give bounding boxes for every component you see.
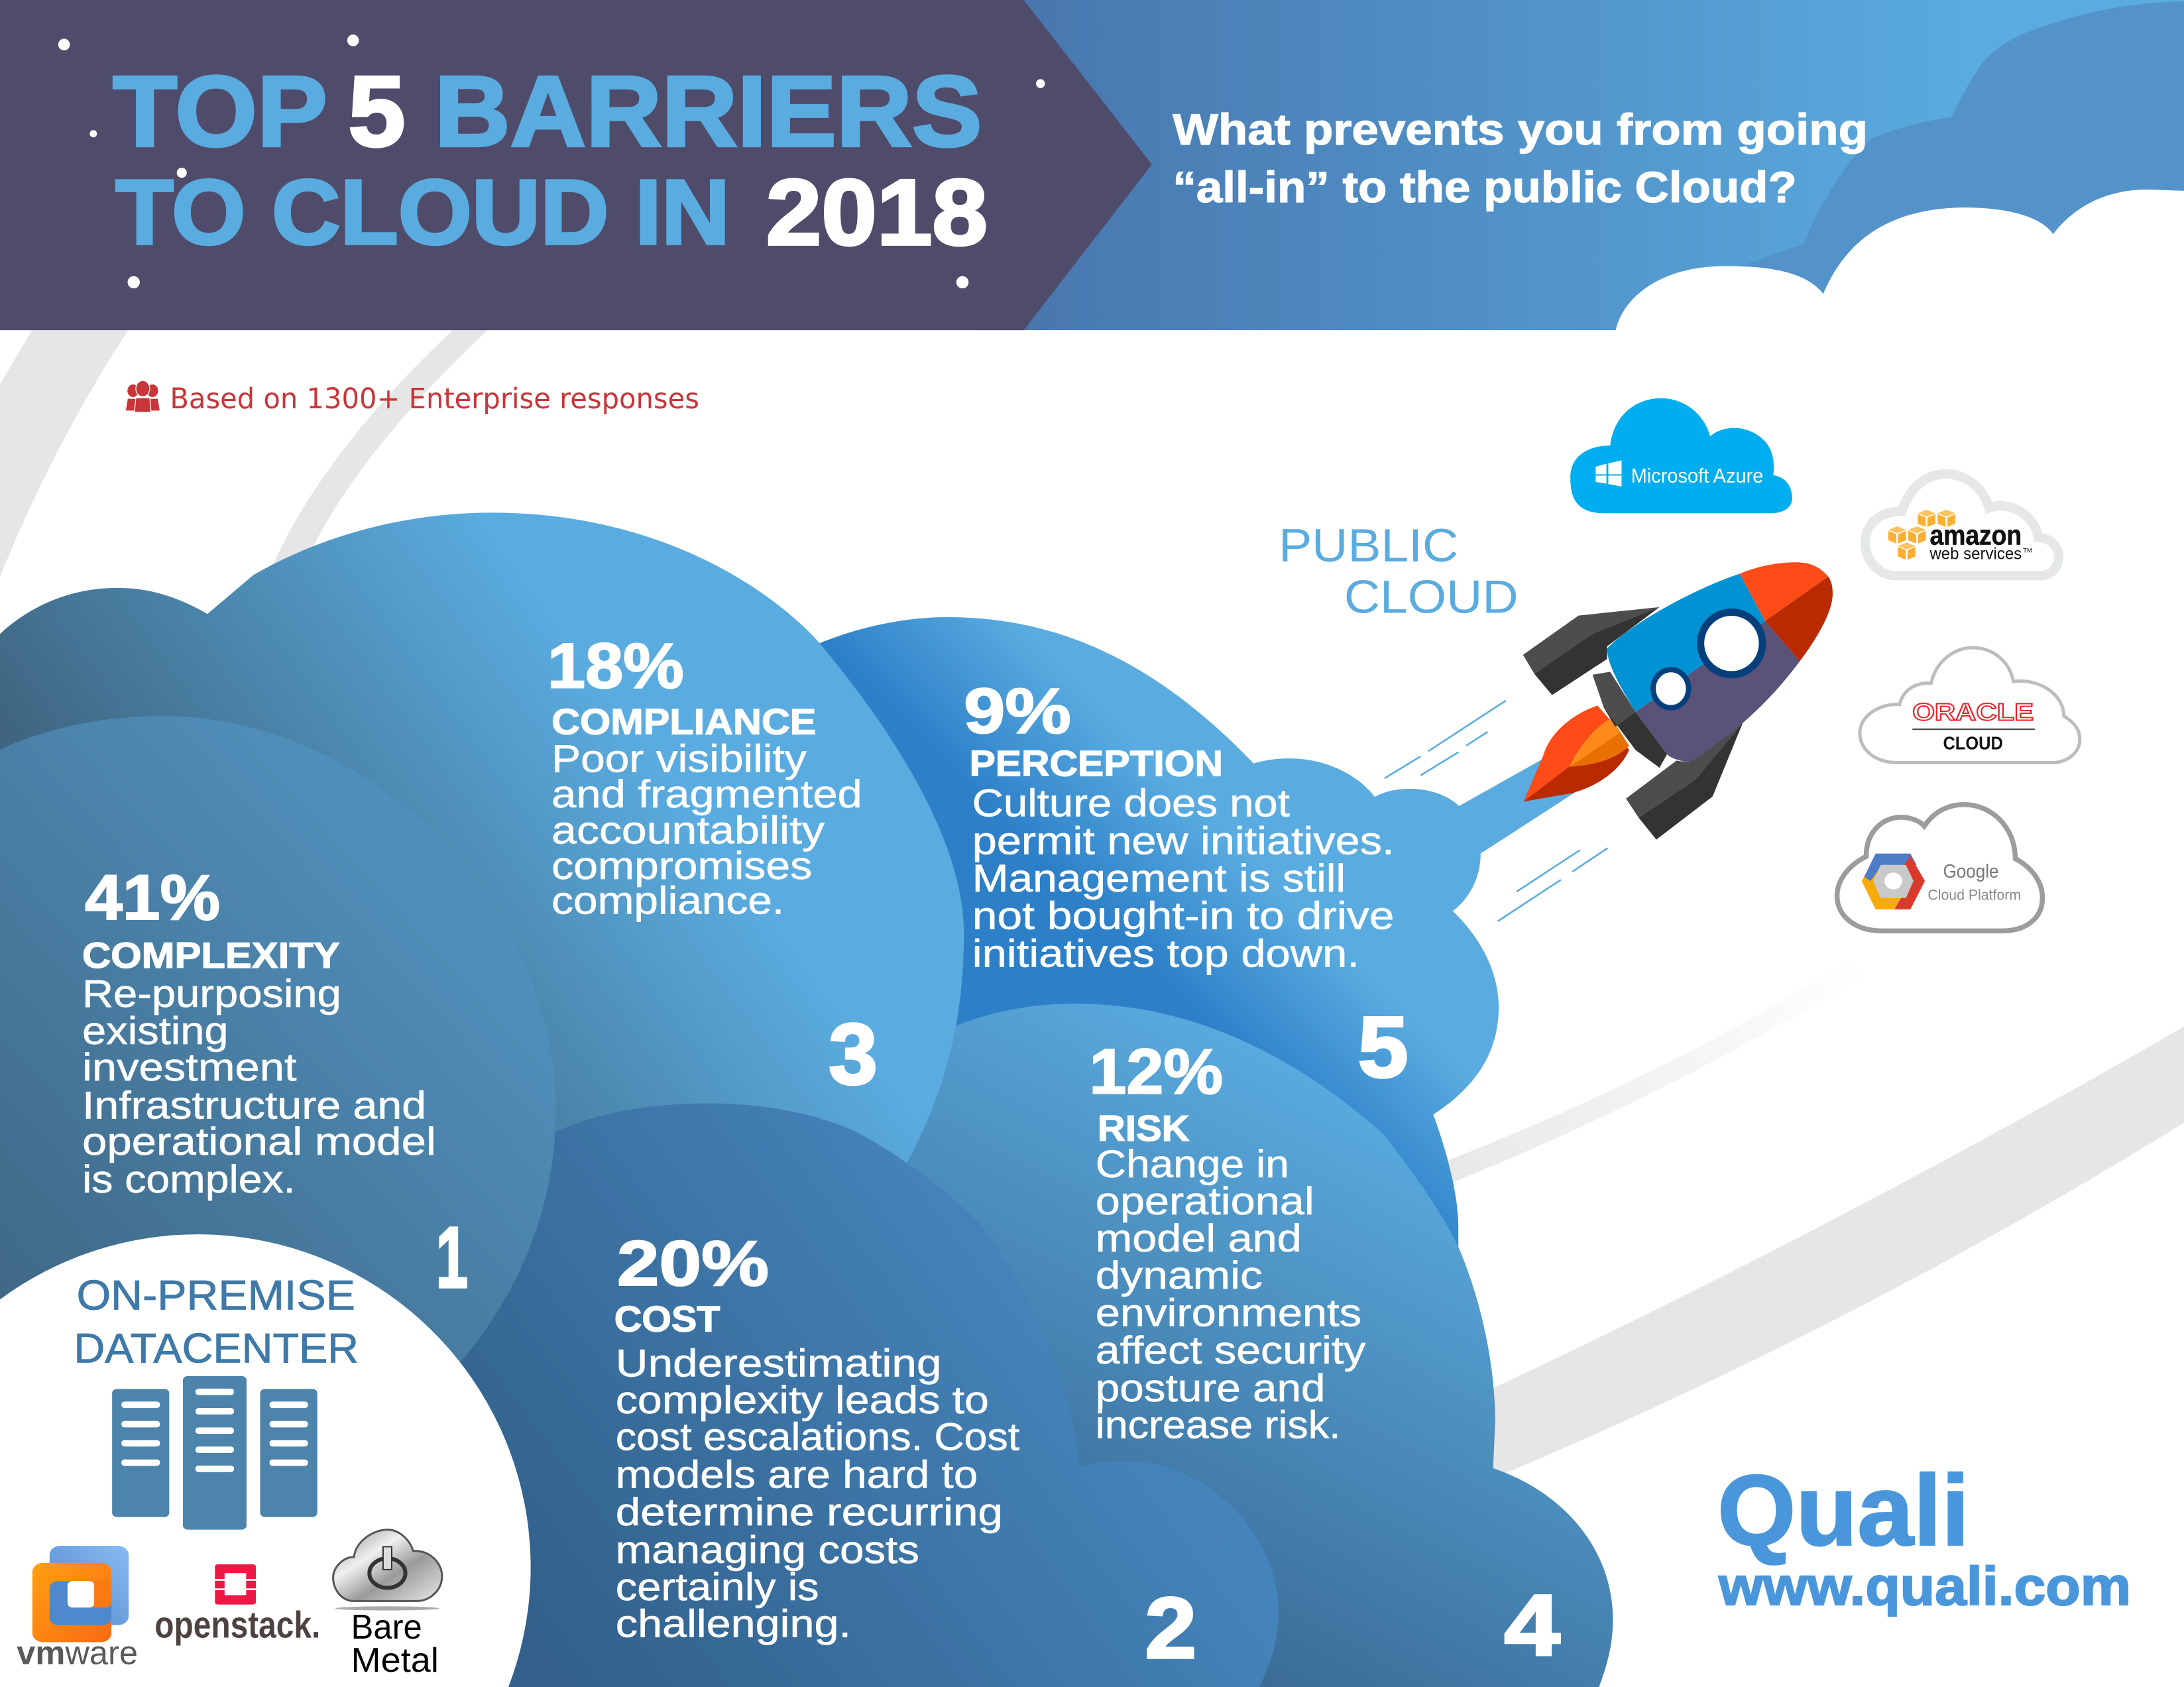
grey background swooshes (0, 330, 2184, 1519)
panel: complexity 41%: investment (82, 1046, 297, 1089)
public cloud heading: CLOUD (1344, 571, 1519, 623)
panel: risk 12%: RISK (1098, 1108, 1190, 1149)
panel: risk 12%: operational (1096, 1180, 1314, 1223)
title text: 5 (348, 56, 406, 168)
quali logo and url: www.quali.com (1718, 1556, 2131, 1617)
panel: complexity 41%: is complex. (82, 1158, 295, 1201)
cloud 4 risk (836, 1004, 1613, 1687)
panel: risk 12%: model and (1096, 1217, 1302, 1260)
logo: oracle cloud: ORACLE (1912, 699, 2034, 726)
logo: microsoft azure cloud: Microsoft Azure (1631, 465, 1763, 487)
subtitle question (1173, 105, 1868, 212)
portholes (1653, 612, 1762, 708)
quali logo and url: Quali (1717, 1455, 1969, 1567)
panel: risk 12%: increase risk. (1096, 1404, 1341, 1447)
title text: 2018 (766, 160, 988, 264)
panel: compliance 18%: 3 (829, 1006, 878, 1102)
public cloud heading (1279, 519, 1519, 623)
panel: perception 9%: 5 (1358, 999, 1408, 1096)
panel: risk 12%: 4 (1505, 1577, 1560, 1674)
panel: complexity 41%: Infrastructure and (82, 1084, 426, 1128)
title text: BARRIERS (435, 56, 982, 168)
subtitle question: What prevents you from going (1173, 105, 1868, 154)
logo: amazon web services cloud: amazon (1929, 520, 2022, 551)
logo: bare metal (333, 1530, 442, 1679)
panel: cost 20%: COST (614, 1299, 720, 1339)
logo: bare metal: Bare (351, 1607, 422, 1646)
logo: google cloud platform: Google (1943, 861, 1999, 882)
icon: server racks (112, 1376, 317, 1530)
flame (1524, 705, 1629, 801)
panel: cost 20%: challenging. (616, 1602, 851, 1645)
panel: perception 9%: PERCEPTION (970, 744, 1223, 784)
decorative stars (58, 34, 1045, 288)
panel: cost 20%: 2 (1145, 1580, 1196, 1676)
panel: complexity 41% (82, 862, 468, 1306)
header band (975, 0, 2184, 362)
logo: vmware (17, 1546, 138, 1672)
panel: risk 12%: affect security (1096, 1329, 1366, 1372)
subtitle question: “all-in” to the public Cloud? (1173, 163, 1797, 212)
panel: complexity 41%: Re-purposing (82, 972, 341, 1016)
panel: perception 9%: not bought-in to drive (972, 895, 1395, 938)
panel: complexity 41%: 41% (85, 862, 220, 933)
quali logo and url (1717, 1455, 2131, 1617)
logo: amazon web services cloud: TM (2023, 547, 2032, 554)
panel: compliance 18%: compliance. (551, 880, 784, 923)
title banner (0, 0, 1152, 330)
logo: openstack: openstack. (154, 1605, 320, 1647)
panel: perception 9%: Culture does not (972, 782, 1290, 825)
public cloud heading: PUBLIC (1279, 519, 1458, 571)
panel: compliance 18%: and fragmented (551, 773, 862, 816)
on-premise circle (0, 1234, 531, 1687)
fins (1523, 607, 1743, 840)
panel: complexity 41%: 1 (436, 1209, 468, 1306)
panel: cost 20%: certainly is (616, 1566, 819, 1609)
logo: openstack (154, 1564, 320, 1647)
icon: people (125, 380, 160, 412)
logo: bare metal: Metal (351, 1641, 439, 1679)
rocket exhaust trail (1456, 758, 1576, 864)
speed lines (1385, 701, 1607, 921)
logo: google cloud platform (1837, 805, 2042, 931)
panel: cost 20%: cost escalations. Cost (616, 1416, 1019, 1459)
panel: risk 12% (1089, 1036, 1560, 1674)
panel: perception 9% (964, 675, 1408, 1096)
panel: complexity 41%: operational model (82, 1120, 436, 1163)
panel: cost 20%: Underestimating (616, 1342, 942, 1385)
panel: compliance 18%: accountability (551, 809, 825, 852)
panel: cost 20%: complexity leads to (616, 1379, 989, 1422)
logo: oracle cloud: CLOUD (1943, 733, 2003, 754)
panel: perception 9%: Management is still (972, 857, 1346, 900)
on-premise datacenter heading: ON-PREMISE (77, 1272, 355, 1318)
panel: perception 9%: permit new initiatives. (972, 819, 1395, 862)
title text: TOP (113, 56, 327, 168)
logo: amazon web services cloud: web services (1929, 544, 2022, 563)
panel: perception 9%: 9% (964, 675, 1071, 746)
title text: TO CLOUD IN (115, 161, 730, 264)
on-premise datacenter heading: DATACENTER (74, 1325, 359, 1371)
icon: rocket (1523, 562, 1833, 840)
panel: compliance 18%: COMPLIANCE (551, 701, 816, 742)
panel: compliance 18% (547, 630, 878, 1102)
panel: cost 20% (614, 1228, 1196, 1676)
panel: compliance 18%: compromises (551, 844, 812, 888)
logo: vmware: vmware (17, 1634, 138, 1672)
logo: amazon web services cloud (1865, 474, 2059, 575)
panel: cost 20%: 20% (617, 1228, 769, 1299)
survey note: Based on 1300+ Enterprise responses (170, 382, 699, 416)
cloud 2 cost (390, 1103, 1279, 1687)
panel: cost 20%: determine recurring (616, 1491, 1003, 1534)
body (1607, 562, 1833, 763)
panel: complexity 41%: existing (82, 1010, 229, 1053)
logo: microsoft azure cloud (1570, 398, 1792, 513)
panel: risk 12%: environments (1096, 1292, 1361, 1335)
panel: risk 12%: Change in (1096, 1143, 1289, 1186)
cloud 3 compliance (0, 512, 964, 1253)
panel: risk 12%: 12% (1089, 1036, 1223, 1108)
cloud 1 complexity (0, 716, 555, 1533)
panel: perception 9%: initiatives top down. (972, 932, 1359, 975)
cloud 5 perception (794, 617, 1499, 1261)
title text (113, 56, 988, 264)
panel: compliance 18%: Poor visibility (551, 737, 807, 780)
on-premise datacenter heading (74, 1272, 359, 1371)
logo: google cloud platform: Cloud Platform (1927, 887, 2021, 903)
panel: cost 20%: models are hard to (616, 1453, 978, 1496)
logo: oracle cloud (1860, 648, 2080, 763)
panel: compliance 18%: 18% (547, 630, 684, 702)
panel: risk 12%: posture and (1096, 1367, 1325, 1410)
panel: risk 12%: dynamic (1096, 1254, 1263, 1297)
panel: complexity 41%: COMPLEXITY (82, 935, 340, 976)
panel: cost 20%: managing costs (616, 1529, 919, 1572)
